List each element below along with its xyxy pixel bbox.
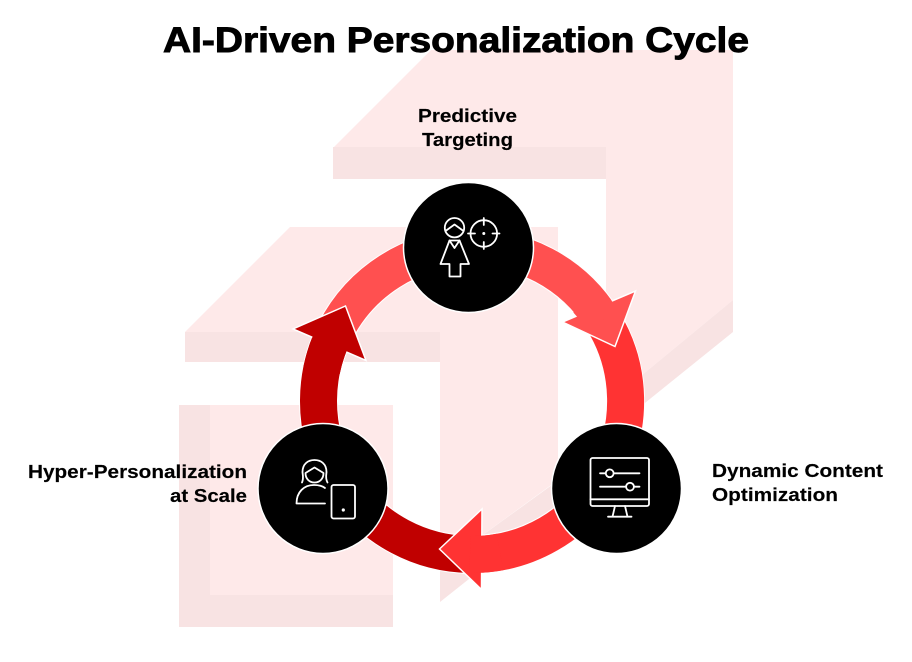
node: dynamic content optimization [552,424,682,554]
background watermark logo [179,50,733,627]
arc: dynamic content segment [470,320,626,555]
label: Predictive Targeting: Predictive [418,105,517,126]
node: hyper-personalization at scale [258,424,388,554]
arrowhead: toward hyper-personalization [440,509,482,590]
arrow shaft joining head: pink [587,300,602,320]
icon: person with tablet [296,460,355,518]
title: AI-Driven Personalization Cycle [163,21,749,60]
label: Hyper-Personalization at Scale [28,461,247,506]
arrow shaft joining head: red [470,552,500,555]
label: Hyper-Personalization at Scale: at Scale [170,485,247,506]
arc: predictive to dynamic, upper segment [336,247,602,330]
label: Dynamic Content Optimization: Optimization [712,484,838,505]
label: Hyper-Personalization at Scale: Hyper-Personalization [28,461,247,482]
label: Dynamic Content Optimization: Dynamic Content [712,460,883,481]
cycle ring with arrows [293,247,636,590]
arrow shaft joining head: dark red [322,330,336,370]
arrowhead: toward dynamic content [562,291,636,346]
label: Predictive Targeting: Targeting [422,129,513,150]
arc: hyper-personalization segment [318,330,470,554]
icon: monitor with sliders [590,458,649,517]
icon: person with target [440,218,500,276]
label: Dynamic Content Optimization [712,460,883,505]
label: Predictive Targeting [418,105,517,150]
node: predictive targeting [404,182,534,312]
arrowhead: toward predictive targeting [293,306,366,360]
